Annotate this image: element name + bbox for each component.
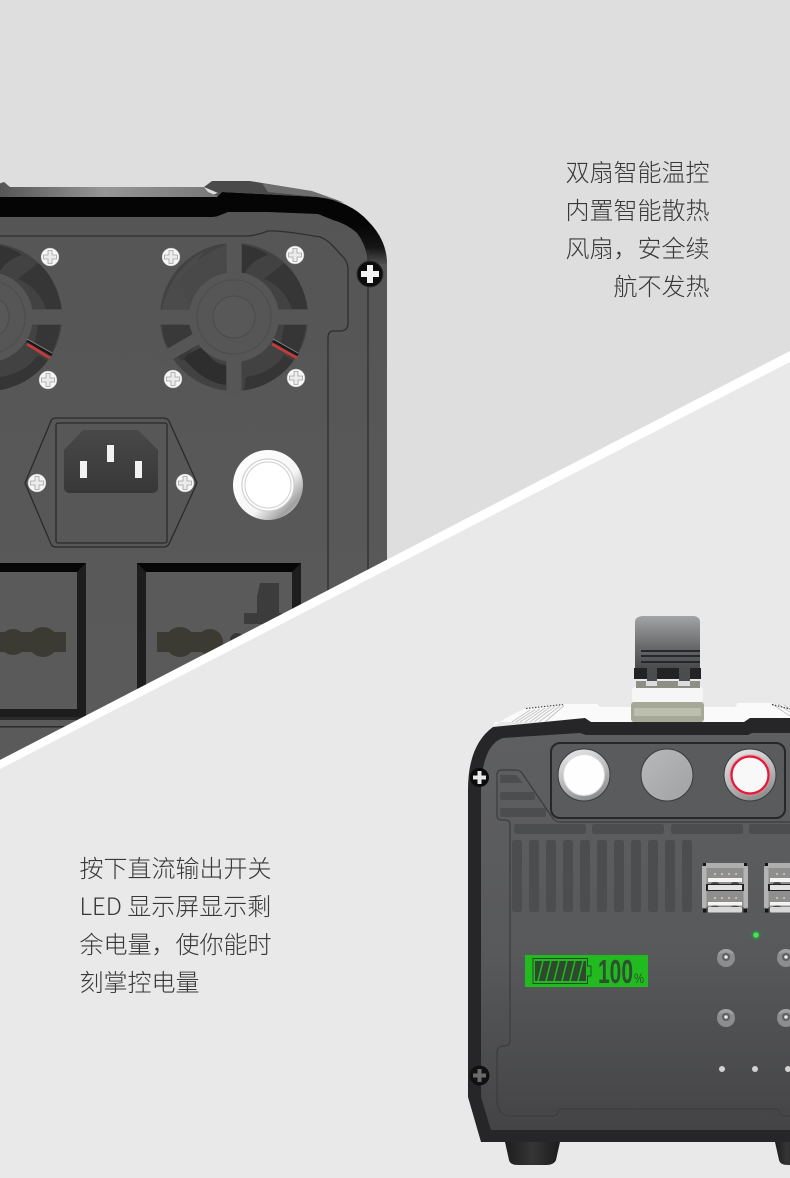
vertical vents <box>512 840 692 912</box>
AC outlet left <box>0 563 86 718</box>
text block: LED display switch <box>80 849 272 998</box>
top control panel <box>551 743 785 818</box>
socket pins <box>80 445 142 478</box>
LCD battery display <box>525 953 648 990</box>
text block: LED display switch: 按下直流输出开关 <box>80 849 272 884</box>
fan mounting screws <box>39 246 305 389</box>
red ring power button <box>724 749 776 801</box>
rear body <box>0 192 387 800</box>
DC jacks <box>717 949 790 1027</box>
rear hatch grooves <box>262 183 340 201</box>
AC outlet right <box>137 563 301 689</box>
front view of power station <box>468 616 790 1165</box>
hatch dark dashes <box>526 704 790 709</box>
hatch grooves on shell <box>512 704 790 722</box>
text block: dual fan cooling: 内置智能散热 <box>566 191 710 226</box>
white top shell <box>493 703 790 727</box>
indicator dots <box>719 1066 790 1072</box>
LCD battery display: % <box>634 970 644 986</box>
body outline grooves <box>497 770 790 1116</box>
IEC socket <box>64 430 158 493</box>
carry handle <box>631 616 704 722</box>
background: lower light panel <box>0 362 790 1178</box>
fan wires <box>27 339 298 358</box>
text block: dual fan cooling: 双扇智能温控 <box>566 153 710 188</box>
text block: dual fan cooling: 航不发热 <box>614 267 710 302</box>
right cooling fan <box>160 244 308 390</box>
black frame <box>468 718 790 1142</box>
front body panel <box>481 733 790 1130</box>
text block: dual fan cooling: 风扇，安全续 <box>566 229 710 264</box>
black frame screw <box>357 261 383 287</box>
text block: dual fan cooling <box>566 153 710 302</box>
grey button <box>641 749 693 801</box>
rear top metal strip <box>0 182 220 197</box>
USB ports <box>702 863 790 912</box>
rear lower seam <box>0 717 88 728</box>
battery icon <box>533 958 591 984</box>
green LED indicator <box>751 930 761 940</box>
rear panel outline <box>0 231 368 600</box>
rear black frame band <box>0 192 387 264</box>
text block: LED display switch: 余电量，使你能时 <box>80 925 272 960</box>
slanted vent recesses <box>500 775 546 817</box>
AC inlet plate <box>25 418 197 547</box>
rear top right shoulder <box>204 181 345 203</box>
rear power button <box>233 450 303 520</box>
upper slot row <box>514 824 790 834</box>
text block: LED display switch: LED 显示屏显示剩 <box>80 887 271 922</box>
diagonal white divider <box>0 351 790 1178</box>
left cooling fan <box>0 244 62 390</box>
rubber feet <box>505 1142 790 1165</box>
front upper screw <box>470 768 489 787</box>
rear view of power station <box>0 181 387 800</box>
text block: LED display switch: 刻掌控电量 <box>80 963 200 998</box>
front lower screw <box>470 1066 490 1086</box>
white button <box>558 749 610 801</box>
percent readout: 100 <box>598 953 633 990</box>
